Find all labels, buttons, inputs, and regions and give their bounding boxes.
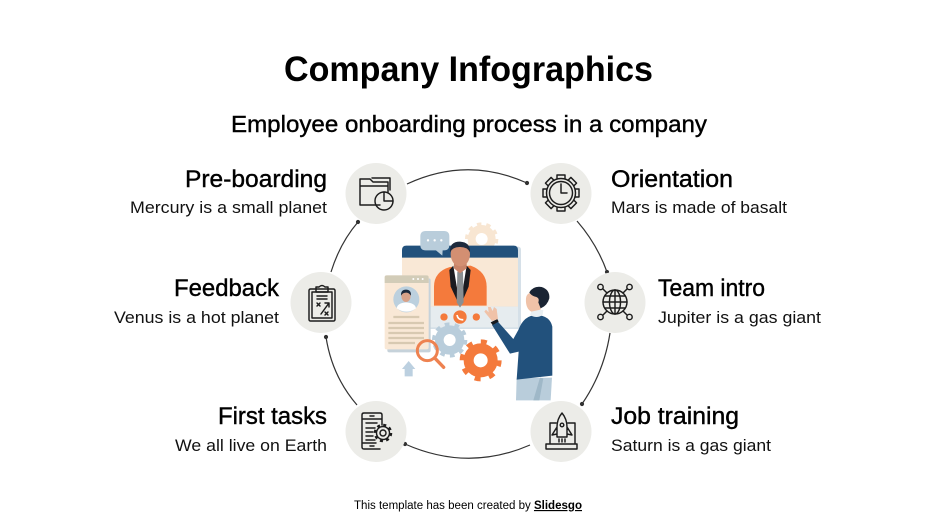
icon: clipboard with tactics xyxy=(290,272,352,333)
label: Orientation: Orientation xyxy=(611,166,733,193)
title: Company Infographics xyxy=(284,50,653,89)
subtitle: Employee onboarding process in a company xyxy=(231,111,708,137)
icon: phone with gear xyxy=(346,401,406,462)
gear: pale background xyxy=(467,224,496,254)
icon: rocket on laptop xyxy=(530,401,592,462)
cycle arrows xyxy=(324,170,610,458)
step: Orientation xyxy=(530,163,787,224)
label: First tasks: First tasks xyxy=(218,403,327,430)
profile card xyxy=(385,275,431,352)
label: Pre-boarding: Pre-boarding xyxy=(185,166,327,193)
description: Venus: Venus is a hot planet xyxy=(114,308,279,327)
description: Jupiter: Jupiter is a gas giant xyxy=(658,308,821,327)
central illustration xyxy=(385,224,552,400)
label: Feedback: Feedback xyxy=(174,275,280,302)
speech bubble xyxy=(420,231,449,256)
gear: blue xyxy=(434,324,465,356)
person xyxy=(484,287,552,400)
footer credit: This template has been created by Slidesgo xyxy=(354,500,582,512)
gear: orange xyxy=(462,342,499,379)
label: Team intro: Team intro xyxy=(658,275,765,302)
description: Mercury: Mercury is a small planet xyxy=(130,198,327,217)
step: Feedback xyxy=(114,272,352,333)
step: Team intro xyxy=(584,272,821,333)
video window xyxy=(402,246,521,329)
icon: globe network xyxy=(584,272,646,333)
presenter xyxy=(434,242,487,308)
call controls xyxy=(440,310,480,324)
step: Pre-boarding xyxy=(130,163,406,224)
description: Earth: We all live on Earth xyxy=(175,436,327,455)
step: First tasks xyxy=(175,401,406,462)
icon: folder with pie chart xyxy=(346,163,406,224)
description: Mars: Mars is made of basalt xyxy=(611,198,787,217)
icon: gear with clock xyxy=(530,163,592,224)
magnifying glass xyxy=(417,341,444,367)
step: Job training xyxy=(530,401,771,462)
description: Saturn: Saturn is a gas giant xyxy=(611,436,771,455)
up arrow xyxy=(402,361,415,376)
label: Job training: Job training xyxy=(611,403,739,430)
